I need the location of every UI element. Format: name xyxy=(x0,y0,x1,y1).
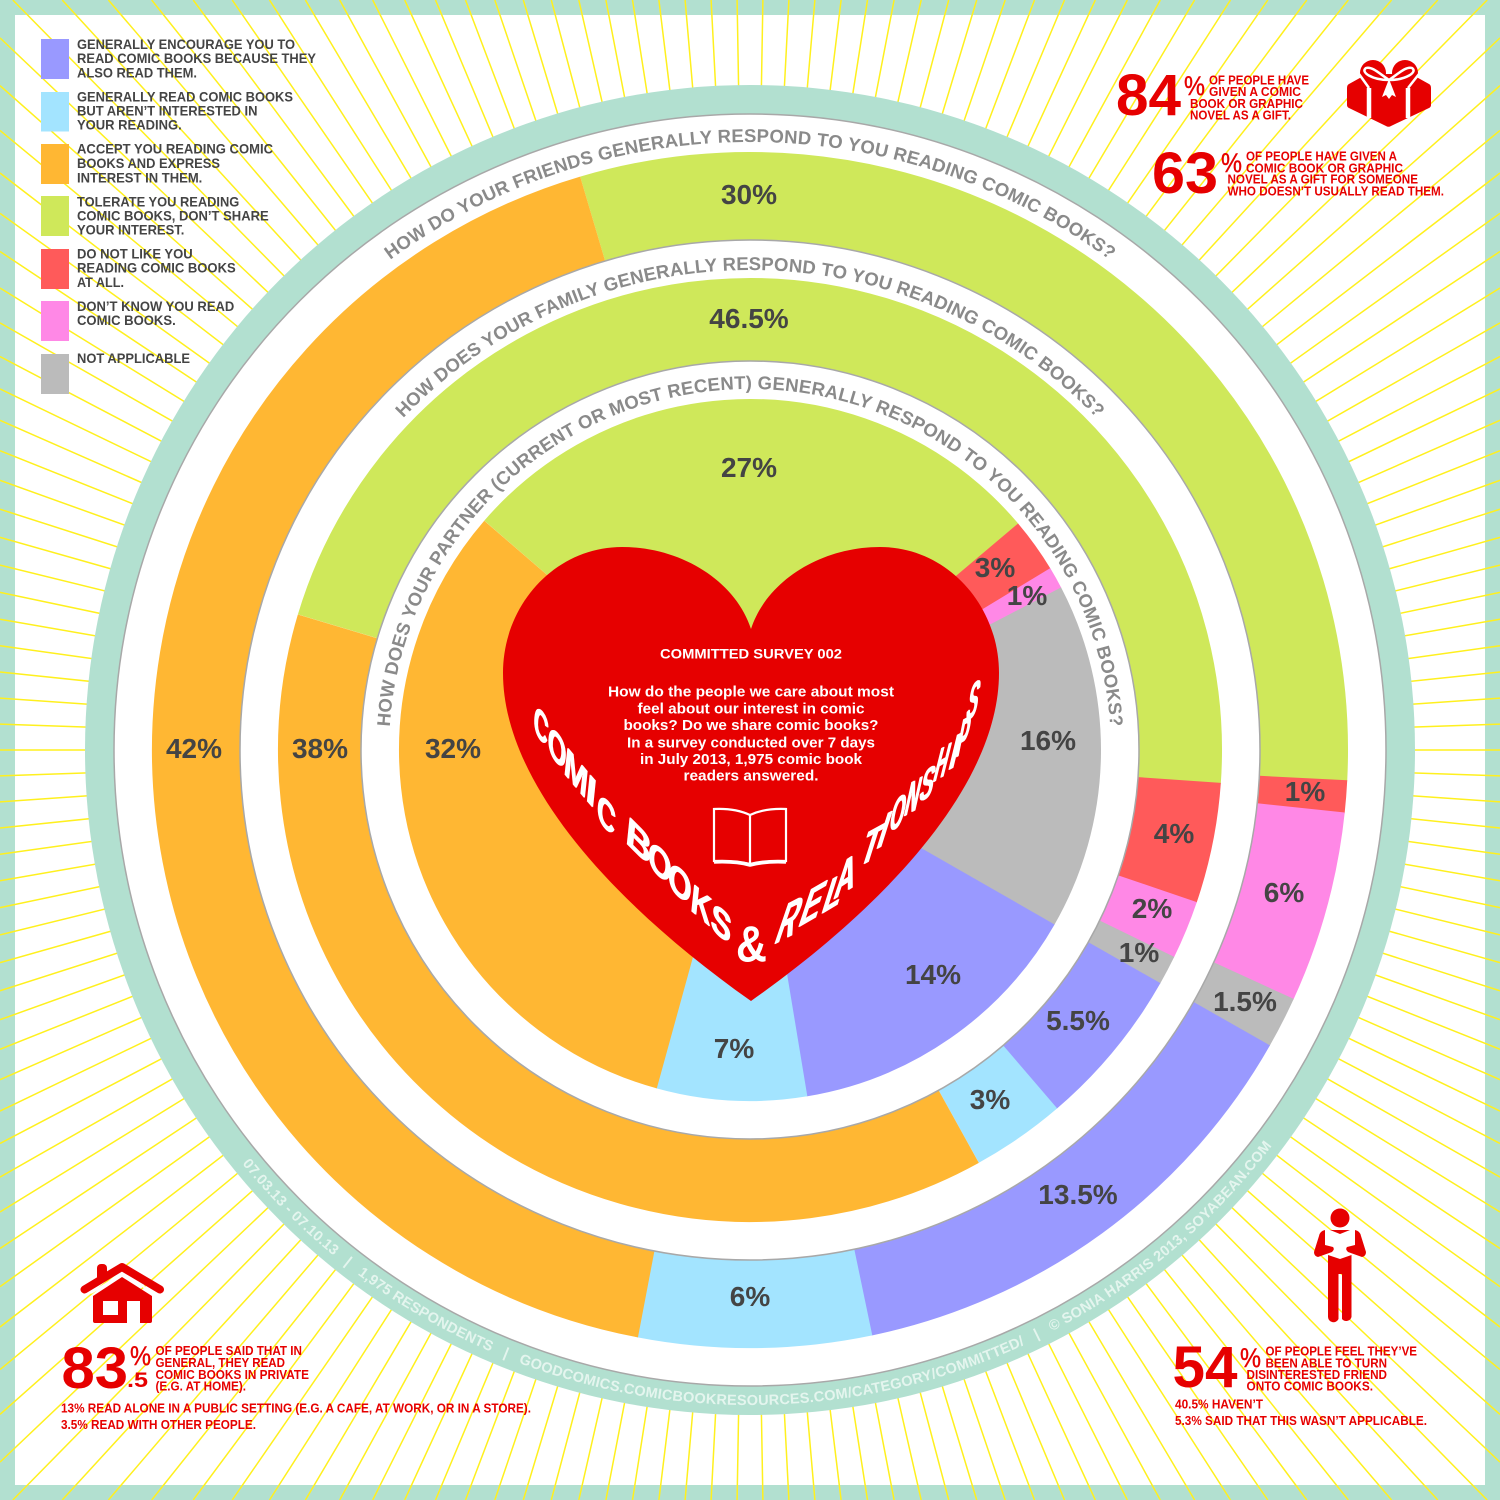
legend item: read but not interested: BUT AREN’T INTERESTED IN xyxy=(77,102,258,118)
legend item: don't know: COMIC BOOKS. xyxy=(77,312,176,328)
stat: 83.5 percent read in private xyxy=(61,1336,531,1432)
family question: HOW DOES YOUR FAMILY GENERALLY RESPOND TO YOU READING COMIC BOOKS? xyxy=(395,257,1104,418)
stat: 54 percent turned a friend: 5.3% SAID THAT THIS WASN’T APPLICABLE. xyxy=(1175,1414,1427,1428)
percentage labels: 5.5% xyxy=(1046,1005,1110,1036)
title: comic books & relationships: I xyxy=(584,764,599,819)
stat: 54 percent turned a friend: BEEN ABLE TO TURN xyxy=(1266,1356,1387,1370)
title: comic books & relationships: B xyxy=(624,808,654,875)
percentage labels: 6% xyxy=(1264,877,1304,908)
stat: 63 percent gift for non reader: COMIC BOOK OR GRAPHIC xyxy=(1246,161,1403,175)
title: comic books & relationships: C xyxy=(595,784,617,847)
stat: 63 percent gift for non reader: OF PEOPLE HAVE GIVEN A xyxy=(1246,150,1397,164)
percentage labels: 27% xyxy=(721,452,777,483)
legend item: read but not interested: GENERALLY READ COMIC BOOKS xyxy=(77,88,293,104)
legend item: not applicable: NOT APPLICABLE xyxy=(77,350,190,366)
heart intro text: In a survey conducted over 7 days xyxy=(627,734,875,751)
stat: 54 percent turned a friend: OF PEOPLE FEEL THEY’VE xyxy=(1266,1345,1417,1359)
percentage labels: 46.5% xyxy=(709,303,789,334)
stat: 83.5 percent read in private: (E.G. AT HOME). xyxy=(156,1380,246,1394)
percentage labels: 13.5% xyxy=(1038,1179,1118,1210)
title: comic books & relationships: S xyxy=(916,753,940,813)
percentage labels: 3% xyxy=(975,552,1015,583)
title: comic books & relationships: O xyxy=(666,852,694,916)
heart intro text: How do the people we care about most xyxy=(608,684,894,701)
icon: person reading xyxy=(1314,1208,1366,1322)
legend item: don't know: DON’T KNOW YOU READ xyxy=(77,298,234,314)
title: comic books & relationships: O xyxy=(646,831,674,895)
stat: 83.5 percent read in private: 83 xyxy=(62,1336,128,1401)
legend item: do not like: DO NOT LIKE YOU xyxy=(77,246,193,262)
icon: gift xyxy=(1347,60,1431,127)
legend item: encourage: READ COMIC BOOKS BECAUSE THEY xyxy=(77,50,317,66)
title: comic books & relationships: I xyxy=(871,798,898,862)
percentage labels: 6% xyxy=(730,1281,770,1312)
legend item: read but not interested: YOUR READING. xyxy=(77,117,182,133)
percentage labels: 14% xyxy=(905,959,961,990)
partner question: HOW DOES YOUR PARTNER (CURRENT OR MOST RECENT) GENERALLY RESPOND TO YOU READING COMIC BOOKS? xyxy=(377,376,1123,726)
title: comic books & relationships: K xyxy=(689,875,714,935)
legend item: accept: ACCEPT YOU READING COMIC xyxy=(77,141,273,157)
legend item: tolerate: TOLERATE YOU READING xyxy=(77,193,239,209)
icon: open book xyxy=(714,809,786,865)
heart intro text: books? Do we share comic books? xyxy=(624,717,878,734)
percentage labels xyxy=(166,179,1325,1312)
stat: 54 percent turned a friend: 40.5% HAVEN’T xyxy=(1175,1398,1263,1412)
percentage labels: 1.5% xyxy=(1213,986,1277,1017)
stat: 83.5 percent read in private: OF PEOPLE SAID THAT IN xyxy=(156,1344,302,1358)
legend item: read but not interested xyxy=(41,88,293,133)
stat: 63 percent gift for non reader: % xyxy=(1221,148,1242,178)
percentage labels: 32% xyxy=(425,733,481,764)
title: comic books & relationships: L xyxy=(816,858,853,926)
title: comic books & relationships: R xyxy=(768,882,810,958)
title: comic books & relationships: H xyxy=(929,732,955,795)
legend item: encourage: GENERALLY ENCOURAGE YOU TO xyxy=(77,36,295,52)
friends question: HOW DO YOUR FRIENDS GENERALLY RESPOND TO YOU READING COMIC BOOKS? xyxy=(384,129,1115,260)
legend item: tolerate: YOUR INTEREST. xyxy=(77,222,184,238)
percentage labels: 4% xyxy=(1154,818,1194,849)
stat: 63 percent gift for non reader: NOVEL AS A GIFT FOR SOMEONE xyxy=(1228,172,1418,186)
stat: 83.5 percent read in private: .5 xyxy=(127,1369,148,1392)
legend item: tolerate: COMIC BOOKS, DON’T SHARE xyxy=(77,207,269,223)
heart intro text: feel about our interest in comic xyxy=(638,700,864,717)
title: comic books & relationships: M xyxy=(562,737,590,808)
stat: 84 percent gift: NOVEL AS A GIFT. xyxy=(1190,108,1291,122)
stat: 54 percent turned a friend: DISINTERESTED FRIEND xyxy=(1246,1368,1387,1382)
percentage labels: 16% xyxy=(1020,725,1076,756)
legend item: do not like: AT ALL. xyxy=(77,274,124,290)
legend item: not applicable xyxy=(41,350,190,394)
title: comic books & relationships: E xyxy=(792,868,833,941)
panel: partner pie xyxy=(360,360,1140,1140)
percentage labels: 1% xyxy=(1285,776,1325,807)
title: comic books & relationships xyxy=(532,666,984,972)
stat: 83.5 percent read in private: 3.5% READ WITH OTHER PEOPLE. xyxy=(61,1418,256,1432)
legend item: do not like: READING COMIC BOOKS xyxy=(77,260,236,276)
percentage labels: 30% xyxy=(721,179,777,210)
stat: 54 percent turned a friend: % xyxy=(1240,1343,1261,1373)
legend item: tolerate xyxy=(41,193,269,238)
stat: 84 percent gift xyxy=(1116,63,1309,128)
legend item: accept xyxy=(41,141,273,185)
title: comic books & relationships: P xyxy=(953,702,975,770)
percentage labels: 1% xyxy=(1007,580,1047,611)
percentage labels: 1% xyxy=(1119,937,1159,968)
title: comic books & relationships: S xyxy=(963,666,984,734)
stat: 84 percent gift: OF PEOPLE HAVE xyxy=(1209,74,1309,88)
heart intro text xyxy=(608,647,894,785)
stat: 63 percent gift for non reader: 63 xyxy=(1152,141,1218,206)
stat: 54 percent turned a friend: ONTO COMIC BOOKS. xyxy=(1246,1380,1373,1394)
title: comic books & relationships: I xyxy=(944,722,966,783)
legend item: encourage: ALSO READ THEM. xyxy=(77,64,197,80)
legend item: encourage xyxy=(41,36,317,80)
title: comic books & relationships: O xyxy=(886,783,910,844)
stat: 83.5 percent read in private: % xyxy=(130,1341,151,1371)
stat: 84 percent gift: GIVEN A COMIC xyxy=(1209,85,1301,99)
stat: 83.5 percent read in private: 13% READ ALONE IN A PUBLIC SETTING (E.G. A CAFE, AT WORK, OR IN A STORE). xyxy=(61,1402,531,1416)
legend item: do not like xyxy=(41,246,236,290)
stat: 84 percent gift: 84 xyxy=(1116,63,1181,128)
title: comic books & relationships: A xyxy=(831,841,861,912)
title: comic books & relationships: & xyxy=(736,915,767,972)
heart intro text: COMMITTED SURVEY 002 xyxy=(660,647,842,662)
percentage labels: 2% xyxy=(1132,893,1172,924)
legend item: accept: INTEREST IN THEM. xyxy=(77,169,202,185)
stat: 84 percent gift: % xyxy=(1184,71,1205,101)
title: comic books & relationships: S xyxy=(709,894,733,954)
stat: 54 percent turned a friend xyxy=(1172,1335,1427,1428)
stat: 63 percent gift for non reader: WHO DOESN’T USUALLY READ THEM. xyxy=(1228,184,1444,198)
title: comic books & relationships: N xyxy=(900,766,926,828)
percentage labels: 38% xyxy=(292,733,348,764)
percentage labels: 3% xyxy=(970,1084,1010,1115)
title: comic books & relationships: T xyxy=(853,811,890,879)
title: comic books & relationships: O xyxy=(546,715,568,782)
heart xyxy=(503,547,999,1001)
icon: house xyxy=(84,1264,160,1323)
stat: 63 percent gift for non reader xyxy=(1152,141,1444,206)
heart intro text: readers answered. xyxy=(684,768,818,785)
stat: 84 percent gift: BOOK OR GRAPHIC xyxy=(1190,97,1303,111)
panel: legend xyxy=(41,36,317,394)
legend item: don't know xyxy=(41,298,234,341)
credits text along ring: 07.03.13 - 07.10.13 | 1,975 RESPONDENTS | GOODCOMICS.COMICBOOKRESOURCES.COM/CATEGORY/COMMITTED/ | © SONIA HARRIS 2013, SOYABEAN.COM xyxy=(244,1140,1272,1406)
stat: 83.5 percent read in private: GENERAL, THEY READ xyxy=(156,1356,285,1370)
heart intro text: in July 2013, 1,975 comic book xyxy=(640,751,863,768)
stat: 83.5 percent read in private: COMIC BOOKS IN PRIVATE xyxy=(156,1368,309,1382)
stat: 54 percent turned a friend: 54 xyxy=(1172,1335,1238,1400)
legend item: accept: BOOKS AND EXPRESS xyxy=(77,155,220,171)
title: comic books & relationships: C xyxy=(532,694,550,757)
percentage labels: 7% xyxy=(714,1033,754,1064)
percentage labels: 42% xyxy=(166,733,222,764)
